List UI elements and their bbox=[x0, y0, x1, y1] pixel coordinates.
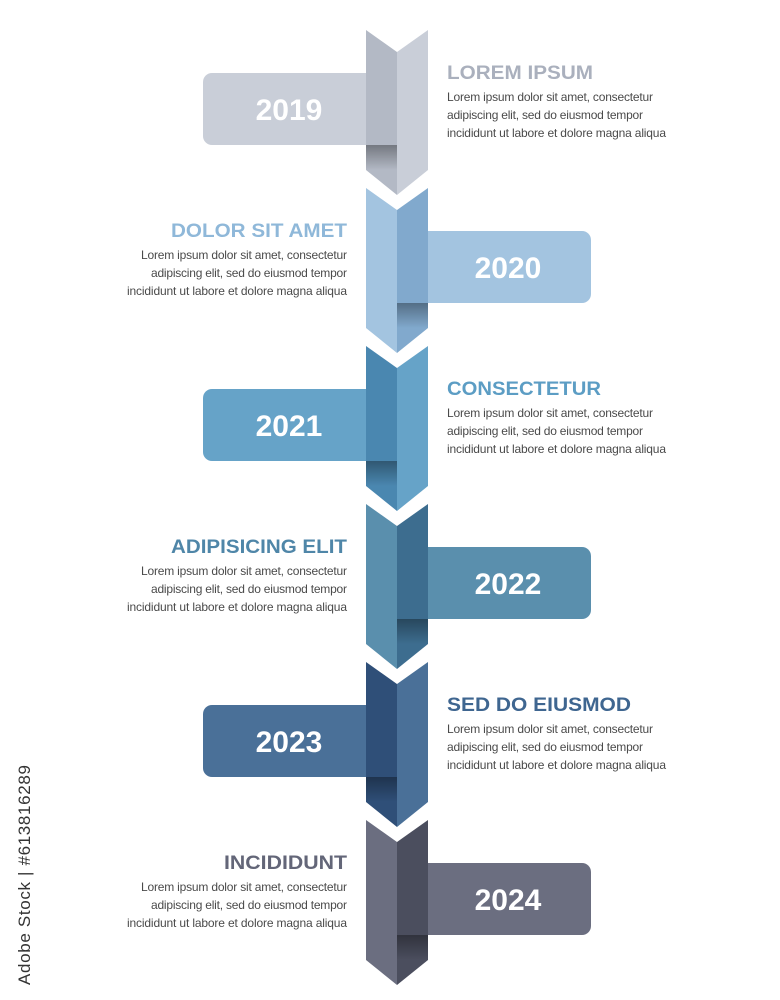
text block: incididunt: incididunt ut labore et dolore magna aliqua bbox=[127, 916, 347, 930]
year tab 2021: 2021 bbox=[256, 410, 322, 443]
text block: lorem ipsum: LOREM IPSUM bbox=[447, 63, 593, 84]
text block: adipisicing elit: incididunt ut labore et dolore magna aliqua bbox=[127, 600, 347, 614]
text block: lorem ipsum: incididunt ut labore et dolore magna aliqua bbox=[447, 126, 666, 140]
text block: dolor sit amet: Lorem ipsum dolor sit amet, consectetur bbox=[141, 248, 347, 262]
segment 2019 bbox=[203, 30, 428, 195]
text block: lorem ipsum: Lorem ipsum dolor sit amet, consectetur bbox=[447, 90, 653, 104]
year tab 2022: 2022 bbox=[475, 568, 541, 601]
year tab 2019 bbox=[203, 73, 397, 170]
text block: consectetur bbox=[447, 379, 666, 456]
segment 2024 bbox=[366, 820, 591, 985]
year tab 2023 bbox=[203, 705, 397, 802]
year tab 2024: 2024 bbox=[475, 884, 542, 917]
text block: lorem ipsum bbox=[447, 63, 666, 140]
text block: adipisicing elit bbox=[127, 537, 347, 614]
year tab 2020: 2020 bbox=[475, 252, 541, 285]
text block: dolor sit amet: DOLOR SIT AMET bbox=[171, 221, 347, 242]
text block: adipisicing elit: adipiscing elit, sed do eiusmod tempor bbox=[151, 582, 347, 596]
text block: lorem ipsum: adipiscing elit, sed do eiusmod tempor bbox=[447, 108, 643, 122]
text block: consectetur: Lorem ipsum dolor sit amet, consectetur bbox=[447, 406, 653, 420]
text block: incididunt: Lorem ipsum dolor sit amet, consectetur bbox=[141, 880, 347, 894]
text block: sed do eiusmod: adipiscing elit, sed do eiusmod tempor bbox=[447, 740, 643, 754]
text block: incididunt bbox=[127, 853, 347, 930]
text block: sed do eiusmod: SED DO EIUSMOD bbox=[447, 695, 631, 716]
year tab 2022 bbox=[397, 547, 591, 644]
year tab 2021 bbox=[203, 389, 397, 486]
text block: incididunt: adipiscing elit, sed do eiusmod tempor bbox=[151, 898, 347, 912]
year tab 2023: 2023 bbox=[256, 726, 322, 759]
text block: consectetur: CONSECTETUR bbox=[447, 379, 601, 400]
text block: consectetur: incididunt ut labore et dolore magna aliqua bbox=[447, 442, 666, 456]
text block: sed do eiusmod bbox=[447, 695, 666, 772]
text block: dolor sit amet bbox=[127, 221, 347, 298]
text block: consectetur: adipiscing elit, sed do eiusmod tempor bbox=[447, 424, 643, 438]
year tab 2020 bbox=[397, 231, 591, 328]
text block: adipisicing elit: Lorem ipsum dolor sit amet, consectetur bbox=[141, 564, 347, 578]
text block: incididunt: INCIDIDUNT bbox=[224, 853, 347, 874]
text block: dolor sit amet: incididunt ut labore et dolore magna aliqua bbox=[127, 284, 347, 298]
watermark: Adobe Stock | #613816289 bbox=[15, 765, 34, 985]
segment 2020 bbox=[366, 188, 591, 353]
text block: adipisicing elit: ADIPISICING ELIT bbox=[171, 537, 347, 558]
year tab 2024 bbox=[397, 863, 591, 960]
segment 2021 bbox=[203, 346, 428, 511]
year tab 2019: 2019 bbox=[256, 94, 322, 127]
text block: sed do eiusmod: incididunt ut labore et dolore magna aliqua bbox=[447, 758, 666, 772]
text block: dolor sit amet: adipiscing elit, sed do eiusmod tempor bbox=[151, 266, 347, 280]
segment 2022 bbox=[366, 504, 591, 669]
segment 2023 bbox=[203, 662, 428, 827]
text block: sed do eiusmod: Lorem ipsum dolor sit amet, consectetur bbox=[447, 722, 653, 736]
